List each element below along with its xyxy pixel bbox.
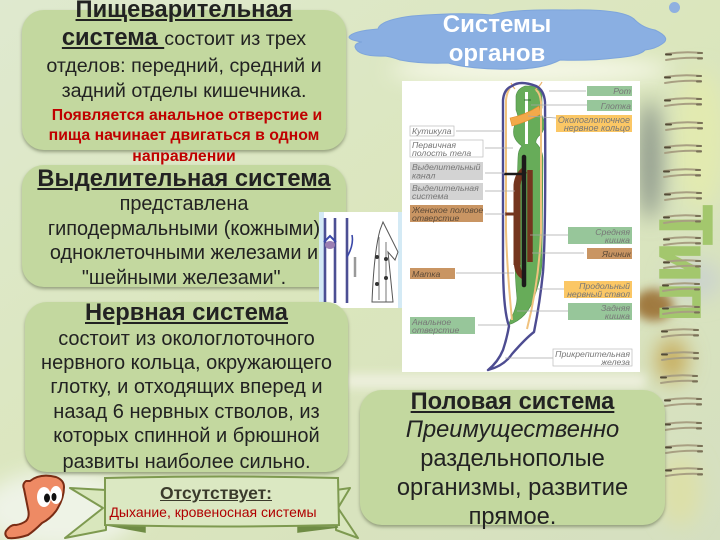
label: nerve trunk: нервный ствол — [567, 289, 630, 299]
label: attachment gland: Прикрепительная — [555, 349, 630, 359]
text: reproductive description: прямое. — [469, 504, 556, 530]
text: nervous description — [41, 328, 332, 473]
text: excretory description: гиподермальными (кожными) — [48, 218, 320, 240]
worm body — [488, 82, 545, 370]
label: excretory system — [410, 183, 483, 201]
panel: reproductive system — [360, 390, 665, 525]
text: excretory description: "шейными железами". — [82, 267, 286, 289]
label: midgut — [568, 227, 632, 245]
label: body cavity — [410, 140, 483, 158]
text: digestive description: задний отделы кишечника. — [62, 80, 306, 102]
label: attachment gland — [553, 349, 632, 367]
heading: absent: Отсутствует: — [160, 483, 272, 503]
text: nervous description: которых спинной и брюшной — [53, 425, 320, 447]
diagram: worm anatomy — [402, 81, 640, 372]
icon: cartoon worm — [4, 474, 65, 540]
label: pharynx — [587, 100, 632, 111]
heading: systems of organs: органов — [449, 40, 545, 67]
label: midgut: Средняя — [595, 227, 630, 237]
label: cuticle: Кутикула — [412, 126, 452, 136]
label: female opening: Женское половое — [411, 205, 483, 215]
label: excretory canal: канал — [412, 170, 435, 180]
leader lines — [456, 91, 587, 358]
decorative blue dot — [669, 2, 680, 13]
labels — [410, 86, 632, 367]
label: hindgut: кишка — [605, 311, 630, 321]
label: nerve trunk: Продольный — [579, 281, 630, 291]
label: ovary: Яичник — [601, 249, 632, 259]
label: anal opening — [410, 317, 475, 335]
label: anal opening: Анальное — [411, 317, 451, 327]
label: uterus: Матка — [412, 269, 441, 279]
label: attachment gland: железа — [600, 357, 630, 367]
text: anal opening note — [49, 106, 322, 165]
label: nerve ring: нервное кольцо — [564, 123, 630, 133]
text: nervous description: состоит из окологлоточного — [58, 328, 315, 350]
label: hindgut: Задняя — [601, 303, 630, 313]
text: digestive intro line: система состоит из трех — [62, 25, 306, 51]
text: nervous description: глотку, и отходящих вперед и — [50, 376, 323, 398]
label: anal opening: отверстие — [412, 325, 459, 335]
text: nervous description: назад 6 нервных стволов, из — [53, 401, 320, 423]
text: excretory description: одноклеточными железами и — [50, 242, 318, 264]
heading: systems of organs: Системы — [443, 11, 551, 38]
label: excretory system: система — [412, 191, 448, 201]
label: nerve trunk — [564, 281, 632, 299]
text: reproductive description: Преимущественно — [406, 416, 619, 442]
illustration: excretory glands — [319, 212, 402, 308]
label: nerve ring — [556, 115, 632, 133]
callout: systems of organs cloud — [348, 9, 666, 70]
label: body cavity: полость тела — [412, 148, 471, 158]
text: nervous description: нервного кольца, окружающего — [41, 352, 332, 374]
text: absent systems: Дыхание, кровеносная системы — [109, 504, 317, 520]
label: female opening: отверстие — [412, 213, 459, 223]
label: body cavity: Первичная — [412, 140, 456, 150]
panel: nervous system — [25, 302, 348, 472]
text: reproductive description: раздельнополые — [420, 446, 605, 472]
heading: reproductive system: Половая система — [411, 389, 614, 415]
label: mouth — [587, 86, 632, 96]
label: excretory canal: Выделительный — [412, 162, 481, 172]
label: nerve ring: Окологлоточное — [558, 115, 630, 125]
text: digestive description: отделов: передний, средний и — [46, 54, 322, 76]
text: reproductive description: организмы, развитие — [397, 474, 628, 500]
panel: excretory system — [22, 165, 346, 287]
label: ovary — [587, 248, 632, 259]
label: uterus — [410, 268, 455, 279]
text: excretory description: представлена — [120, 193, 248, 215]
text: reproductive description — [397, 416, 628, 530]
heading: systems of organs — [443, 11, 551, 67]
label: midgut: кишка — [605, 235, 630, 245]
label: pharynx: Глотка — [601, 101, 631, 111]
text: anal opening note: Появляется анальное отверстие и — [52, 106, 322, 124]
spiral binding — [660, 51, 703, 477]
panel: digestive system — [22, 10, 346, 150]
heading: nervous system: Нервная система — [85, 300, 288, 326]
label: female opening — [410, 205, 483, 223]
text: nervous description: развиты наиболее сильно. — [62, 451, 311, 473]
label: hindgut — [568, 303, 632, 321]
text: excretory description — [48, 193, 320, 289]
callout: ribbon absent systems — [64, 476, 359, 539]
text: anal opening note: направлении — [132, 148, 236, 165]
label: excretory canal — [410, 162, 483, 180]
text: anal opening note: пища начинает двигаться в одном — [49, 127, 319, 144]
label: excretory system: Выделительная — [412, 183, 479, 193]
heading: excretory system: Выделительная система — [37, 166, 331, 192]
label: mouth: Рот — [613, 86, 631, 96]
text: digestive description — [46, 54, 322, 102]
